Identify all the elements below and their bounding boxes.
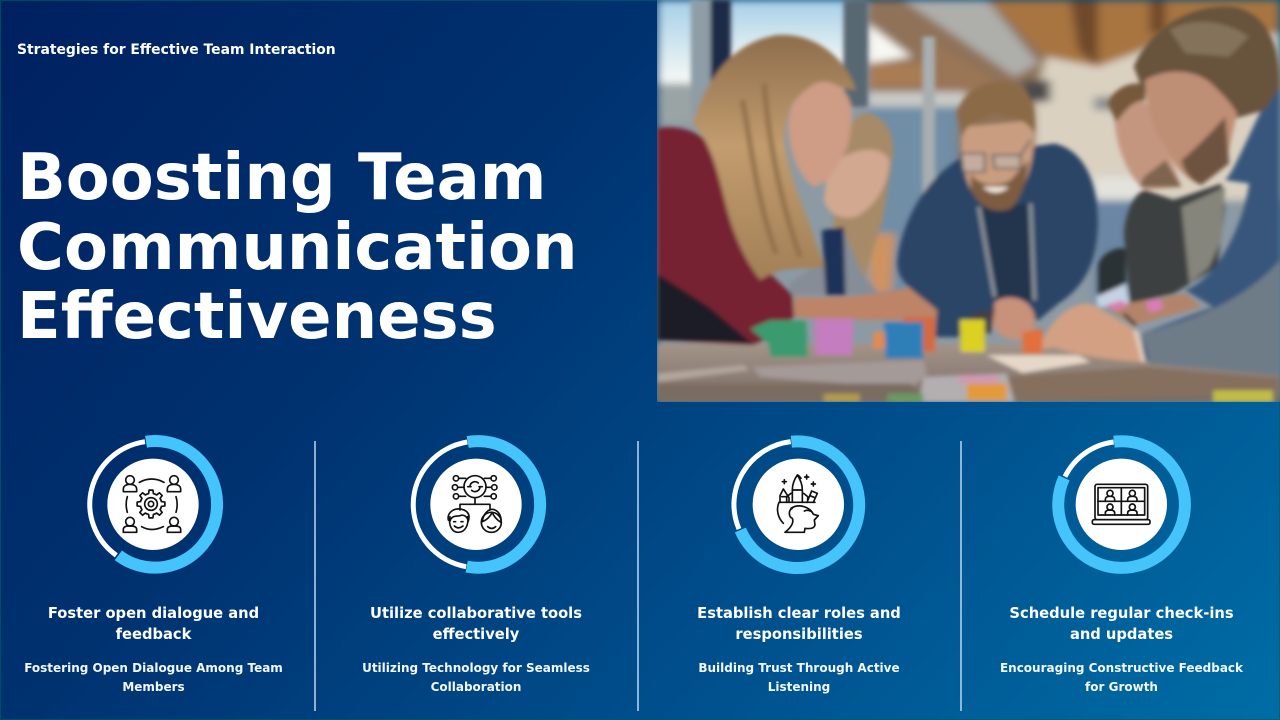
dividers bbox=[314, 441, 316, 711]
description bbox=[698, 661, 900, 694]
right man bbox=[1142, 87, 1280, 375]
eyebrow label: Strategies for Effective Team Interaction bbox=[17, 42, 336, 58]
item 4: regular check-ins bbox=[1000, 435, 1244, 694]
woman left arm bbox=[794, 284, 938, 322]
description: Encouraging Constructive Feedback bbox=[1000, 661, 1243, 675]
description: Building Trust Through Active bbox=[698, 661, 900, 675]
description: Listening bbox=[768, 680, 830, 694]
table bbox=[657, 344, 1280, 402]
icon: head with creative tools ring bbox=[731, 435, 866, 574]
description bbox=[1000, 661, 1244, 694]
heading: responsibilities bbox=[735, 626, 863, 643]
item 2: collaborative tools bbox=[362, 435, 590, 694]
description bbox=[362, 661, 590, 694]
description bbox=[24, 661, 283, 694]
woman left hair & face bbox=[693, 35, 856, 280]
title: Boosting Team bbox=[17, 141, 546, 215]
heading: and updates bbox=[1070, 626, 1173, 643]
heading: effectively bbox=[433, 626, 519, 643]
icon: laptop video call ring bbox=[1052, 435, 1191, 574]
heading bbox=[1009, 605, 1234, 643]
heading: Schedule regular check-ins bbox=[1009, 605, 1234, 622]
title: Communication bbox=[17, 210, 578, 284]
hand bbox=[1038, 304, 1143, 362]
item 1: foster open dialogue bbox=[24, 435, 283, 694]
heading: feedback bbox=[116, 626, 191, 643]
woman left body bbox=[657, 127, 794, 345]
title bbox=[17, 141, 578, 354]
heading bbox=[697, 605, 901, 643]
description: Collaboration bbox=[431, 680, 521, 694]
description: for Growth bbox=[1085, 680, 1158, 694]
description: Members bbox=[122, 680, 185, 694]
heading: Utilize collaborative tools bbox=[370, 605, 582, 622]
heading: Foster open dialogue and bbox=[48, 605, 259, 622]
centre man bbox=[897, 143, 1098, 337]
heading bbox=[48, 605, 259, 643]
item 3: clear roles bbox=[697, 435, 901, 694]
description: Utilizing Technology for Seamless bbox=[362, 661, 590, 675]
icon: people connected by network ring bbox=[410, 435, 546, 574]
blocks bbox=[750, 320, 808, 357]
heading bbox=[370, 605, 582, 643]
man gray bbox=[1124, 183, 1225, 304]
description: Fostering Open Dialogue Among Team bbox=[24, 661, 283, 675]
heading: Establish clear roles and bbox=[697, 605, 901, 622]
photo: team collaborating around a table bbox=[657, 0, 1280, 402]
title: Effectiveness bbox=[17, 280, 497, 354]
woman 2 bbox=[833, 113, 893, 280]
icon: gear and team ring bbox=[87, 435, 224, 574]
